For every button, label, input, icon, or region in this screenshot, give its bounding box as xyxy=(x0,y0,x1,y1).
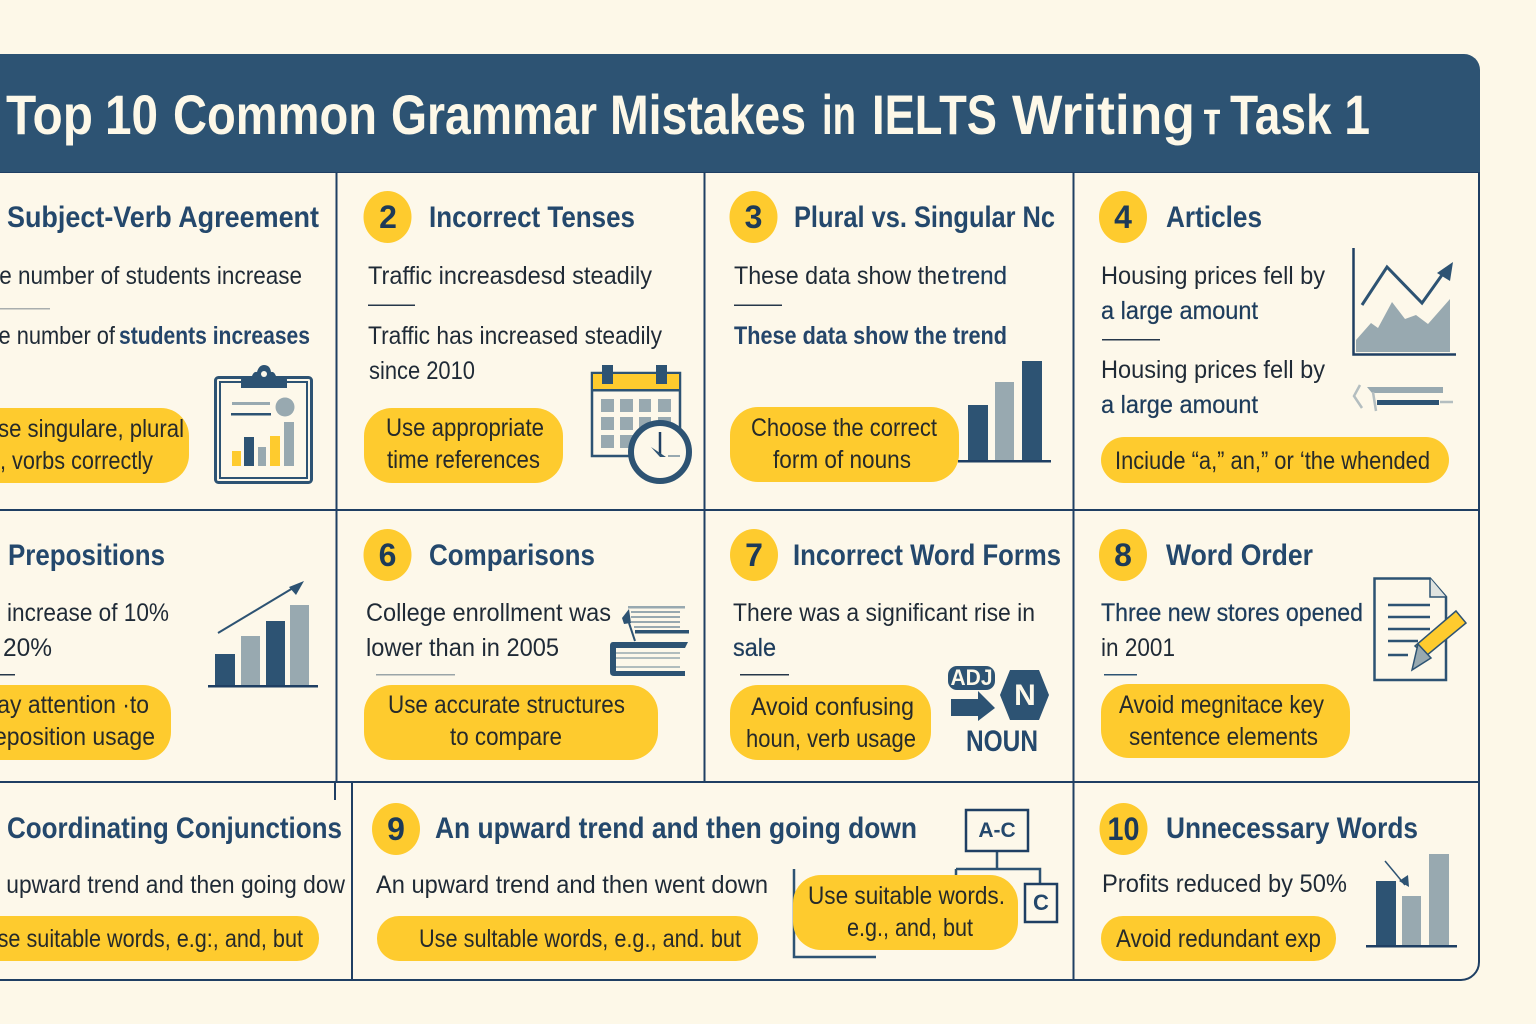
corrected example: since 2010 xyxy=(369,357,475,385)
corrected example xyxy=(1101,356,1325,419)
incorrect example: a large amount xyxy=(1101,297,1258,325)
tip pill xyxy=(1101,916,1336,961)
corrected example: Housing prices fell by xyxy=(1101,356,1325,384)
incorrect example: These data show the xyxy=(734,262,950,290)
icon: bar chart with down arrow xyxy=(1366,854,1457,948)
title: Task 1 xyxy=(1230,83,1370,146)
tip pill: Avoid megnitace key xyxy=(1119,691,1324,719)
example sentence xyxy=(366,599,611,662)
number badge xyxy=(372,803,420,855)
number badge: 2 xyxy=(379,199,397,235)
example sentence: Three new stores opened xyxy=(1101,599,1363,627)
incorrect example xyxy=(1101,262,1325,325)
card 6: Comparisons xyxy=(364,529,689,760)
card 7: Incorrect Word Forms xyxy=(730,529,1061,760)
example sentence: An upward trend and then went down xyxy=(376,871,768,899)
example sentence: increase of 10% xyxy=(7,599,169,627)
icon: hierarchy diagram xyxy=(794,810,1057,957)
example sentence: sale xyxy=(733,634,776,662)
incorrect example: Housing prices fell by xyxy=(1101,262,1325,290)
tip pill xyxy=(364,408,563,483)
title: IELTS xyxy=(872,83,997,146)
number badge xyxy=(730,191,778,243)
tip pill xyxy=(1101,437,1449,483)
card 3: Plural vs. Singular Nouns xyxy=(730,191,1055,482)
tip pill xyxy=(0,685,171,760)
corrected example: These data show the trend xyxy=(734,322,1007,350)
icon: rising bar chart with arrow xyxy=(208,581,318,688)
tip pill xyxy=(0,408,189,483)
example sentence: There was a significant rise in xyxy=(733,599,1035,627)
tip pill: Use accurate structures xyxy=(388,691,625,719)
corrected example: Traffic has increased steadily xyxy=(368,322,662,350)
heading: Unnecessary Words xyxy=(1166,812,1418,845)
card 9: An upward trend xyxy=(372,803,1057,961)
tip pill xyxy=(377,916,758,961)
card 5: Prepositions xyxy=(0,539,318,760)
number badge xyxy=(364,529,412,581)
number badge: 9 xyxy=(387,811,405,847)
icon: line and area chart xyxy=(1354,248,1456,354)
tip pill: time references xyxy=(387,446,540,474)
title: Top xyxy=(6,83,93,146)
heading: Coordinating Conjunctions xyxy=(7,812,342,845)
incorrect example: trend xyxy=(952,262,1007,290)
icon: adjective to noun: NOUN xyxy=(966,725,1038,758)
example sentence: College enrollment was xyxy=(366,599,611,627)
title banner xyxy=(0,54,1480,172)
tip pill xyxy=(0,916,319,961)
panel: main grid frame xyxy=(0,172,1479,980)
icon: document and pencil xyxy=(1374,578,1466,680)
number badge xyxy=(364,191,412,243)
example sentence xyxy=(3,599,169,662)
tip pill: , vorbs correctly xyxy=(0,447,153,475)
tip pill: Avoid redundant exp xyxy=(1116,925,1321,953)
tip pill xyxy=(730,407,959,482)
icon: adjective to noun xyxy=(948,665,1049,758)
example sentence: in 2001 xyxy=(1101,634,1175,662)
number badge xyxy=(1100,803,1148,855)
title: Grammar xyxy=(391,83,597,146)
tip pill: Inciude “a,” an,” or ‘the whended xyxy=(1115,447,1430,475)
tip pill: houn, verb usage xyxy=(746,725,916,753)
heading: Articles xyxy=(1166,201,1262,234)
second tip pill: Use suitable words. xyxy=(808,882,1005,910)
card 8: Word Order xyxy=(1099,529,1466,758)
number badge: 3 xyxy=(745,199,762,235)
card: Coordinating Conjunctions xyxy=(0,812,346,961)
heading: Subject-Verb Agreement xyxy=(7,201,319,234)
number badge: 4 xyxy=(1114,199,1132,235)
corrected example: a large amount xyxy=(1101,391,1258,419)
grid lines xyxy=(0,172,1479,980)
heading: Incorrect Tenses xyxy=(429,201,635,234)
heading: Comparisons xyxy=(429,539,595,572)
icon: adjective to noun: N xyxy=(1014,679,1036,712)
tip pill: Use appropriate xyxy=(386,414,544,442)
tip pill: form of nouns xyxy=(773,446,911,474)
number badge: 6 xyxy=(379,537,396,573)
icon: stacked books xyxy=(610,606,689,676)
icon: clipboard with chart xyxy=(216,365,312,482)
number badge xyxy=(1099,529,1147,581)
tip pill: Avoid confusing xyxy=(751,693,914,721)
second tip pill: e.g., and, but xyxy=(847,914,973,942)
title: Mistakes xyxy=(610,83,806,146)
example sentence xyxy=(733,599,1035,662)
title: in xyxy=(822,83,856,146)
tip pill: Choose the correct xyxy=(751,414,937,442)
card 4: Articles xyxy=(1099,191,1456,483)
heading: Word Order xyxy=(1166,539,1313,572)
second tip pill xyxy=(793,875,1018,950)
corrected example: students increases xyxy=(119,322,310,350)
heading: Plural vs. Singular Nc xyxy=(794,201,1055,234)
icon: bar chart xyxy=(958,361,1051,462)
tip pill: to compare xyxy=(450,723,562,751)
card 2: Incorrect Tenses xyxy=(364,191,689,483)
tip pill xyxy=(364,685,658,760)
example sentence xyxy=(1101,599,1363,662)
corrected example xyxy=(0,322,310,350)
example sentence: 20% xyxy=(3,634,52,662)
tip pill: Use sultable words, e.g., and. but xyxy=(419,925,741,953)
title: 10 xyxy=(105,83,158,146)
title: Common xyxy=(173,83,377,146)
icon: adjective to noun: ADJ xyxy=(950,665,992,690)
corrected example xyxy=(368,322,662,385)
number badge xyxy=(730,529,778,581)
example sentence: Profits reduced by 50% xyxy=(1102,870,1347,898)
card 10: Unnecessary Words xyxy=(1100,803,1457,961)
card 1: Subject-Verb Agreement xyxy=(0,201,319,483)
heading: Incorrect Word Forms xyxy=(793,539,1061,572)
icon: hierarchy diagram: C xyxy=(1033,890,1049,915)
number badge: 10 xyxy=(1108,811,1140,847)
icon: calendar and clock xyxy=(592,365,689,481)
number badge: 7 xyxy=(745,537,763,573)
example sentence: lower than in 2005 xyxy=(366,634,559,662)
heading: An upward trend and then going down xyxy=(435,812,917,845)
incorrect example: Traffic increasdesd steadily xyxy=(368,262,652,290)
tip pill xyxy=(1101,684,1350,758)
title: Writing xyxy=(1012,83,1195,146)
number badge: 8 xyxy=(1114,537,1132,573)
tip pill xyxy=(730,685,931,760)
number badge xyxy=(1099,191,1147,243)
icon: hierarchy diagram: A-C xyxy=(978,819,1016,842)
title: т xyxy=(1203,92,1221,144)
heading: Prepositions xyxy=(8,539,165,572)
icon: small pencil marks xyxy=(1354,385,1453,411)
tip pill: sentence elements xyxy=(1129,723,1318,751)
title xyxy=(6,83,1370,146)
